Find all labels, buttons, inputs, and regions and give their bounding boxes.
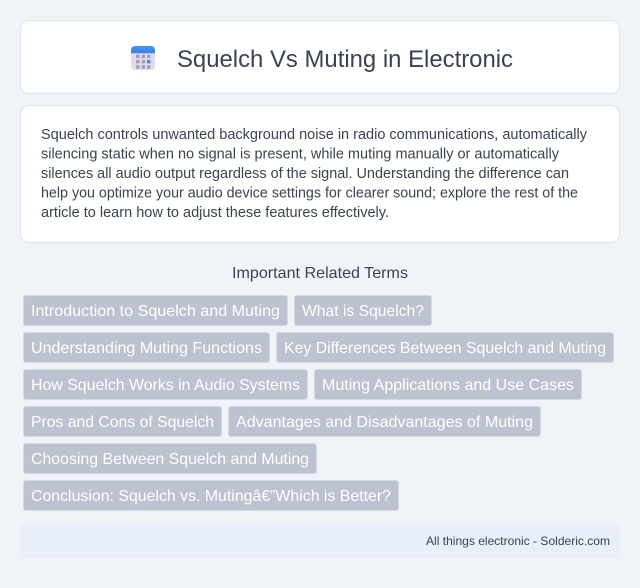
panel: related term tags (24, 296, 614, 510)
tag: introduction (24, 296, 288, 326)
icon: calendar grid (131, 46, 155, 70)
tag: advantages (228, 406, 540, 436)
tag: pros and cons (24, 406, 222, 436)
tag: what is squelch (294, 296, 432, 326)
text block: intro paragraph: article to learn how to adjust these features effectively. (41, 205, 389, 221)
tag: advantages: Advantages and Disadvantages of Muting (236, 414, 533, 431)
text block: intro paragraph: Squelch controls unwanted background noise in radio communications, automatically (41, 127, 588, 143)
panel: footer (20, 524, 620, 558)
tag: choosing: Choosing Between Squelch and Muting (31, 451, 309, 468)
heading: related terms: Important Related Terms (232, 265, 408, 282)
text block: intro paragraph: help you optimize your audio device settings for clearer sound; explore the rest of the (41, 186, 578, 202)
tag: conclusion (24, 480, 398, 510)
text block: intro paragraph: silencing static when no signal is present, while muting manually or automatically (41, 146, 560, 162)
tag: choosing (24, 444, 316, 474)
title: Squelch Vs Muting in Electronic (177, 46, 513, 73)
tag: muting applications: Muting Applications and Use Cases (322, 377, 574, 394)
tag: conclusion: Conclusion: Squelch vs. Mutingâ€”Which is Better? (31, 488, 391, 505)
tag: how squelch works: How Squelch Works in Audio Systems (31, 377, 300, 394)
footer credit: All things electronic - Solderic.com (426, 534, 610, 548)
tag: key differences: Key Differences Between Squelch and Muting (284, 340, 606, 357)
panel: header (20, 20, 620, 94)
tag: how squelch works (24, 370, 308, 400)
tag: introduction: Introduction to Squelch and Muting (31, 303, 280, 320)
tag: muting functions (24, 332, 270, 362)
tag: muting applications (314, 370, 582, 400)
tag: pros and cons: Pros and Cons of Squelch (31, 414, 214, 431)
text block: intro paragraph (41, 127, 588, 221)
tag: what is squelch: What is Squelch? (302, 303, 424, 320)
text block: intro paragraph: silences all audio output regardless of the signal. Understanding the difference can (41, 166, 569, 182)
tag: muting functions: Understanding Muting Functions (31, 340, 262, 357)
panel: intro text (20, 106, 620, 242)
tag: key differences (276, 332, 614, 362)
